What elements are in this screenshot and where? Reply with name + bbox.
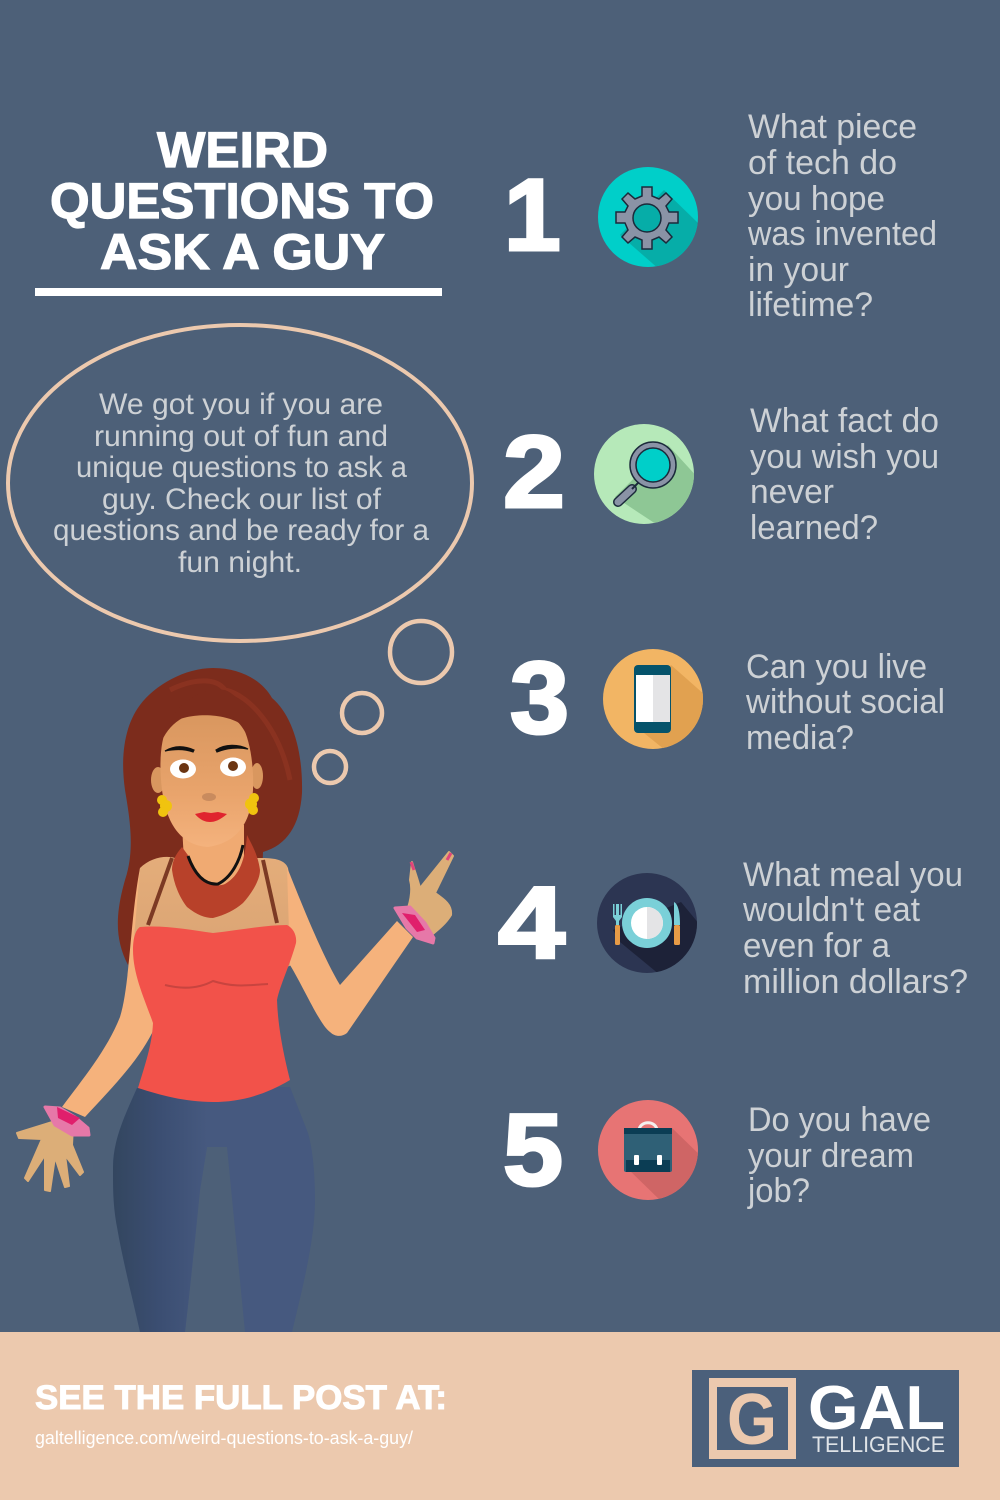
icon: plate and cutlery bbox=[597, 873, 700, 975]
earrings bbox=[157, 793, 259, 817]
logo: G bbox=[727, 1380, 777, 1460]
question 1: of tech do bbox=[748, 144, 897, 182]
question 1: lifetime? bbox=[748, 286, 873, 324]
number 3: 3 bbox=[510, 641, 569, 755]
question 2 bbox=[750, 402, 939, 547]
logo: GAL bbox=[808, 1374, 945, 1443]
number 1: 1 bbox=[504, 158, 561, 272]
number 4: 4 bbox=[498, 866, 565, 980]
thought bubble with intro text: We got you if you are bbox=[99, 388, 383, 421]
question 2: learned? bbox=[750, 509, 878, 547]
question 5: job? bbox=[747, 1172, 810, 1210]
question 4: wouldn't eat bbox=[742, 891, 921, 929]
hair bbox=[118, 668, 302, 965]
thought bubble with intro text: running out of fun and bbox=[94, 420, 388, 453]
icon: smartphone bbox=[603, 649, 705, 750]
icon: briefcase bbox=[598, 1100, 698, 1200]
right hand bbox=[405, 852, 453, 938]
question 4: even for a bbox=[743, 927, 890, 965]
icon: magnifier bbox=[594, 424, 694, 524]
question 4: What meal you bbox=[743, 856, 963, 894]
footer url: galtelligence.com/weird-questions-to-ask-a-guy/ bbox=[35, 1428, 413, 1448]
question 3: Can you live bbox=[746, 648, 927, 686]
question 5: your dream bbox=[748, 1137, 914, 1175]
scarf bbox=[172, 835, 260, 918]
title: QUESTIONS TO bbox=[50, 173, 434, 229]
thought bubble with intro text bbox=[8, 325, 472, 641]
number 5: 5 bbox=[503, 1093, 563, 1207]
item 2 bbox=[503, 402, 939, 547]
item 4 bbox=[498, 856, 968, 1001]
left scrunchie bbox=[45, 1107, 89, 1135]
footer call to action: SEE THE FULL POST AT: bbox=[35, 1379, 447, 1417]
ears bbox=[151, 767, 165, 793]
right scrunchie bbox=[395, 907, 434, 943]
question 2: What fact do bbox=[750, 402, 939, 440]
title: ASK A GUY bbox=[100, 224, 385, 280]
straps bbox=[148, 858, 277, 925]
lips bbox=[195, 812, 227, 822]
question 5 bbox=[747, 1101, 931, 1210]
question 1 bbox=[747, 108, 937, 324]
question 3 bbox=[745, 648, 945, 757]
thought bubble with intro text: guy. Check our list of bbox=[102, 483, 382, 516]
question 1: What piece bbox=[748, 108, 917, 146]
neck bbox=[182, 825, 244, 895]
item 5 bbox=[503, 1093, 931, 1210]
item 3 bbox=[510, 649, 943, 750]
question 2: never bbox=[750, 473, 834, 511]
strapless top bbox=[133, 925, 296, 1102]
title bbox=[35, 122, 442, 296]
thought bubble with intro text: questions and be ready for a bbox=[53, 514, 429, 547]
face bbox=[160, 715, 253, 847]
question 4: million dollars? bbox=[743, 963, 968, 1001]
left arm bbox=[62, 868, 175, 1117]
question 1: in your bbox=[748, 251, 849, 289]
footer bbox=[0, 1332, 1000, 1500]
hair over forehead bbox=[160, 689, 257, 760]
logo bbox=[692, 1370, 959, 1467]
left hand bbox=[17, 1119, 83, 1191]
thought bubble circles bbox=[314, 621, 452, 783]
question 4 bbox=[742, 856, 968, 1001]
item 1 bbox=[504, 108, 937, 324]
nose bbox=[202, 793, 216, 801]
question 3: media? bbox=[746, 719, 854, 757]
question 2: you wish you bbox=[750, 438, 939, 476]
eyes bbox=[165, 745, 248, 778]
thought bubble with intro text: unique questions to ask a bbox=[76, 451, 407, 484]
question 1: you hope bbox=[748, 180, 885, 218]
woman illustration bbox=[17, 668, 453, 1332]
icon: gear bbox=[598, 167, 700, 270]
title: WEIRD bbox=[157, 122, 328, 178]
logo: TELLIGENCE bbox=[812, 1432, 945, 1457]
thought bubble with intro text: fun night. bbox=[178, 546, 302, 579]
right arm bbox=[287, 867, 413, 1036]
number 2: 2 bbox=[503, 415, 565, 529]
question 1: was invented bbox=[747, 215, 937, 253]
torso skin bbox=[133, 857, 300, 1000]
pants bbox=[113, 1087, 315, 1332]
question 5: Do you have bbox=[748, 1101, 931, 1139]
question 3: without social bbox=[745, 683, 945, 721]
